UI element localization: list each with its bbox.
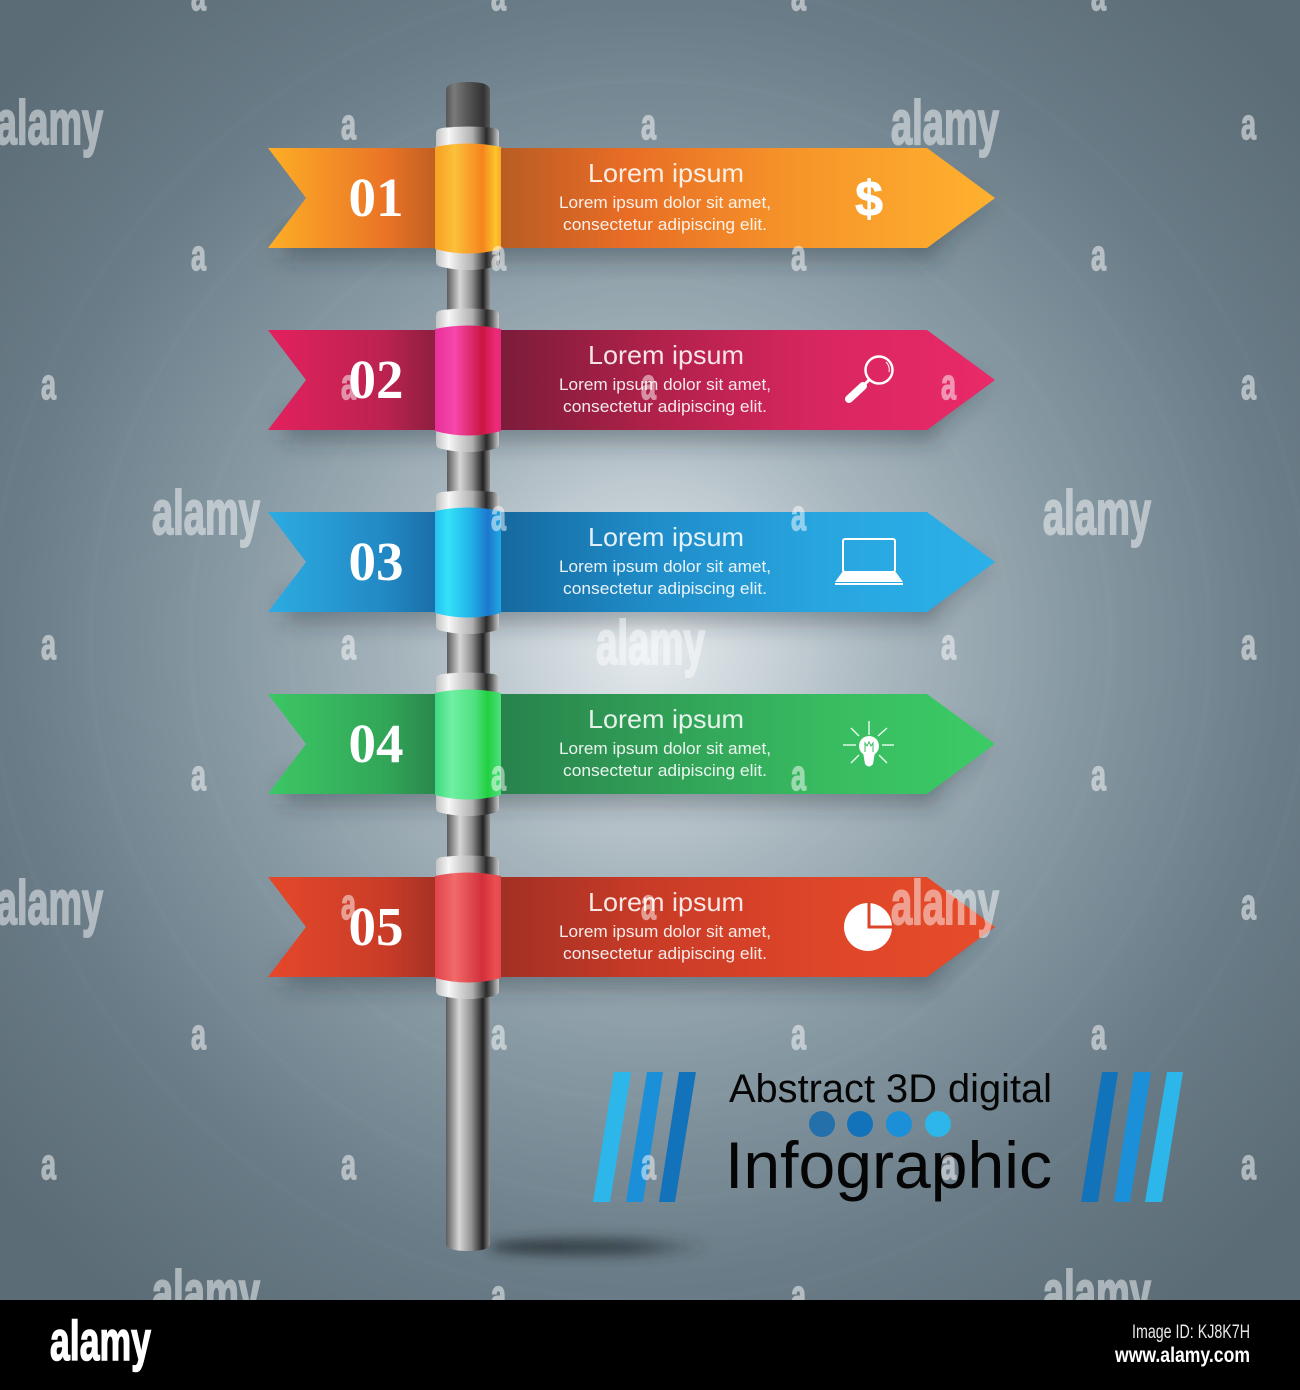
watermarks: a [341, 880, 356, 929]
watermarks: a [1241, 360, 1256, 409]
watermarks: a [341, 1140, 356, 1189]
watermarks: alamy [1043, 1259, 1151, 1328]
ribbon 01 collar [435, 126, 501, 270]
ribbon 01 body: Lorem ipsum dolor sit amet, [559, 193, 771, 212]
ribbon 02 collar [435, 308, 501, 452]
title block [593, 1067, 1183, 1202]
icon: laptop [835, 539, 903, 585]
image id: Image ID: KJ8K7H [1132, 1322, 1250, 1343]
ribbon 02 body line 2: consectetur adipiscing elit. [563, 397, 767, 416]
ribbon 02 heading: Lorem ipsum [588, 340, 744, 370]
number 03: 03 [348, 531, 404, 592]
watermarks: a [491, 1271, 506, 1320]
watermarks: a [491, 751, 506, 800]
ribbon 01 tail [268, 148, 436, 248]
watermarks: a [341, 620, 356, 669]
ribbon 01 [268, 126, 995, 270]
number 04: 04 [348, 713, 404, 774]
ribbon 03 body line 2: consectetur adipiscing elit. [563, 579, 767, 598]
watermarks: a [641, 1140, 656, 1189]
ribbon 04 body line 2: consectetur adipiscing elit. [563, 761, 767, 780]
ribbon 03 collar [435, 490, 501, 634]
title line 1: Abstract 3D digital [729, 1067, 1052, 1111]
watermarks: a [1241, 1140, 1256, 1189]
pole shadow on ground [488, 1238, 712, 1256]
ribbon 05 arrow [500, 877, 995, 977]
ribbon 05 tail [268, 877, 436, 977]
icon: dollar: $ [855, 171, 883, 227]
watermarks: a [941, 620, 956, 669]
dots [809, 1111, 951, 1137]
ribbon 02 arrow [500, 330, 995, 430]
watermarks: a [1091, 1010, 1106, 1059]
watermarks: alamy [0, 869, 103, 938]
watermarks: alamy [1043, 479, 1151, 548]
number 01: 01 [348, 167, 404, 228]
ribbon shadows [285, 180, 985, 987]
left stripes [593, 1072, 696, 1202]
watermarks: alamy [152, 479, 260, 548]
ribbon 04 arrow [500, 694, 995, 794]
watermarks: alamy [0, 89, 103, 158]
watermarks: a [791, 231, 806, 280]
watermarks: a [491, 491, 506, 540]
icon: magnifier [849, 356, 892, 399]
watermarks: a [791, 1010, 806, 1059]
watermarks: alamy [891, 869, 999, 938]
watermarks: a [41, 620, 56, 669]
ribbon 05 heading: Lorem ipsum [588, 887, 744, 917]
watermarks: a [1241, 100, 1256, 149]
watermarks: a [791, 491, 806, 540]
watermarks: alamy [596, 609, 705, 678]
watermarks: a [641, 880, 656, 929]
icon: light bulb [843, 721, 894, 766]
watermarks: a [1091, 751, 1106, 800]
ribbon 01 heading: Lorem ipsum [588, 158, 744, 188]
ribbon 04 [268, 672, 995, 816]
ribbon 04 heading: Lorem ipsum [588, 704, 744, 734]
ribbon 01 body line 2: consectetur adipiscing elit. [563, 215, 767, 234]
watermarks: a [641, 100, 656, 149]
watermarks: alamy [152, 1259, 260, 1328]
watermarks: a [191, 1010, 206, 1059]
watermarks: a [341, 100, 356, 149]
watermarks: a [641, 360, 656, 409]
watermarks: alamy [891, 89, 999, 158]
watermarks: a [791, 751, 806, 800]
signpost pole [446, 82, 490, 1251]
number 02: 02 [348, 349, 404, 410]
ribbon 05 body: Lorem ipsum dolor sit amet, [559, 922, 771, 941]
title line 2: Infographic [725, 1128, 1052, 1202]
ribbon 05 body line 2: consectetur adipiscing elit. [563, 944, 767, 963]
ribbon 02 body: Lorem ipsum dolor sit amet, [559, 375, 771, 394]
watermarks: a [1241, 620, 1256, 669]
ribbon 02 [268, 308, 995, 452]
ribbon 05 [268, 856, 995, 999]
ribbon 03 tail [268, 512, 436, 612]
ribbon 05 collar [435, 856, 501, 999]
watermarks: a [41, 1140, 56, 1189]
footer url: www.alamy.com [1114, 1344, 1250, 1367]
watermarks: a [791, 1271, 806, 1320]
watermarks: a [491, 1010, 506, 1059]
right stripes [1081, 1072, 1183, 1202]
icon: pie chart [844, 902, 893, 951]
watermarks: a [41, 360, 56, 409]
watermarks: a [341, 360, 356, 409]
ribbon 03 heading: Lorem ipsum [588, 522, 744, 552]
watermarks: a [941, 1140, 956, 1189]
watermarks: a [1241, 880, 1256, 929]
footer bar [0, 1300, 1300, 1390]
ribbon 04 collar [435, 672, 501, 816]
ribbon 02 tail [268, 330, 436, 430]
watermarks: a [491, 231, 506, 280]
footer logo: alamy [50, 1309, 151, 1372]
ribbon 03 arrow [500, 512, 995, 612]
ribbon 01 arrow [500, 148, 995, 248]
ribbon 03 [268, 490, 995, 634]
number 05: 05 [348, 896, 404, 957]
ribbon 03 body: Lorem ipsum dolor sit amet, [559, 557, 771, 576]
watermarks: a [191, 231, 206, 280]
watermarks: a [191, 751, 206, 800]
watermarks: a [941, 360, 956, 409]
watermarks: a [1091, 231, 1106, 280]
ribbon 04 tail [268, 694, 436, 794]
ribbon 04 body: Lorem ipsum dolor sit amet, [559, 739, 771, 758]
